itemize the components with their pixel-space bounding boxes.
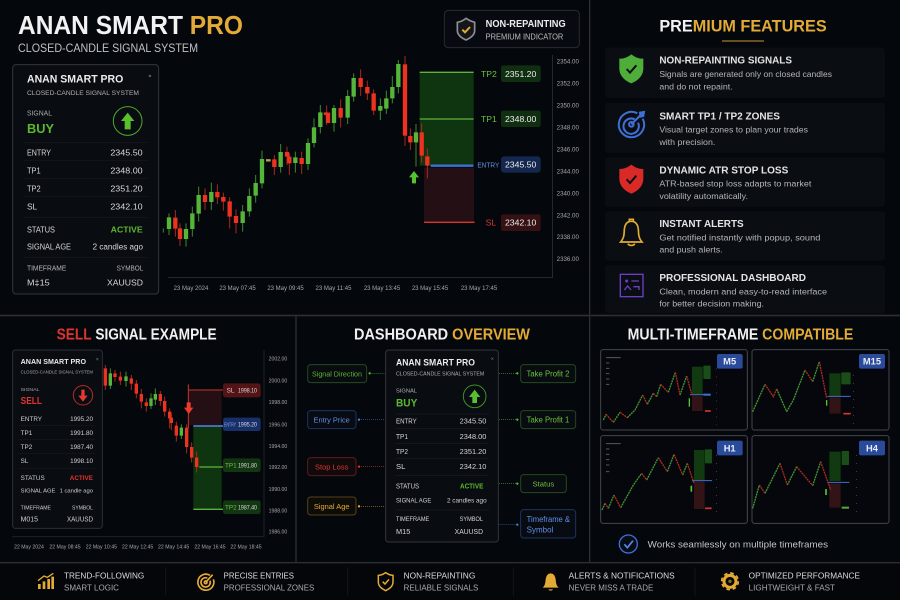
callout: signal direction: Signal Direction bbox=[312, 369, 362, 378]
price axis: 2344.00 bbox=[557, 168, 579, 175]
footer: precise entries bbox=[198, 572, 314, 593]
sell dashboard: × bbox=[96, 357, 99, 363]
footer: alerts and notifications: NEVER MISS A TRADE bbox=[569, 584, 653, 593]
callout: timeframe and symbol: Symbol bbox=[527, 525, 554, 534]
sell dashboard: 1 candle ago bbox=[60, 489, 93, 495]
price axis: 2340.00 bbox=[557, 190, 579, 197]
chart: sell zones bbox=[188, 384, 223, 509]
chart: hero candlesticks bbox=[163, 55, 579, 292]
feature: instant alerts bbox=[605, 211, 885, 261]
feature: non-repainting signals: and do not repaint. bbox=[659, 82, 733, 92]
feature: non-repainting signals: NON-REPAINTING SIGNALS bbox=[659, 56, 792, 67]
sell dashboard: XAUUSD bbox=[67, 517, 93, 524]
overview dashboard: 2345.50 bbox=[460, 417, 486, 426]
label: TP2 bbox=[481, 65, 541, 82]
signal values: 2348.00 bbox=[110, 165, 143, 175]
panel: hero signal dashboard: ANAN SMART PRO bbox=[27, 74, 124, 86]
panel: multi-timeframe background bbox=[591, 317, 900, 562]
icon: red shield bbox=[619, 165, 643, 194]
feature: dynamic ATR stop loss bbox=[605, 157, 885, 207]
title bbox=[18, 12, 243, 55]
badge: H1 bbox=[717, 441, 743, 455]
badge: M15: M15 bbox=[863, 357, 881, 367]
label: TP1 pill: 1991.80 bbox=[238, 464, 258, 470]
heading: DASHBOARD OVERVIEW bbox=[354, 326, 530, 343]
label: TP1 pill: TP1 bbox=[225, 463, 237, 470]
sell dashboard: 1995.20 bbox=[70, 416, 93, 423]
badge: H1: H1 bbox=[724, 443, 736, 453]
price axis: 1992.00 bbox=[269, 465, 287, 471]
label: TP1: 2348.00 bbox=[505, 114, 537, 124]
connector dots bbox=[358, 372, 518, 526]
callout: status bbox=[521, 475, 566, 493]
timeframe and symbol bbox=[27, 266, 143, 288]
price axis: 2002.00 bbox=[269, 357, 287, 363]
date axis bbox=[174, 286, 498, 292]
overview dashboard: ENTRY bbox=[396, 417, 417, 426]
callout: take profit 1 bbox=[521, 411, 576, 429]
overview dashboard: STATUS bbox=[396, 483, 419, 490]
panel: dashboard overview bbox=[308, 326, 576, 542]
callout: stop loss bbox=[308, 458, 356, 476]
price axis: 1998.00 bbox=[269, 400, 287, 406]
chart: M5 bbox=[601, 350, 747, 430]
heading: PREMIUM FEATURES bbox=[659, 16, 827, 35]
price axis bbox=[557, 59, 579, 263]
panel: premium features bbox=[605, 16, 885, 313]
price axis bbox=[269, 357, 287, 536]
overview dashboard: 2 candles ago bbox=[447, 498, 487, 505]
chart axes bbox=[12, 350, 264, 537]
date axis: 23 May 11:45 bbox=[316, 286, 352, 292]
callout: take profit 2 bbox=[521, 365, 576, 383]
note: works seamlessly bbox=[619, 535, 828, 553]
callout: status: Status bbox=[532, 480, 554, 489]
price axis: 1986.00 bbox=[269, 530, 287, 536]
price axis: 1988.00 bbox=[269, 509, 287, 515]
signal values: 2345.50 bbox=[110, 147, 143, 157]
feature: dynamic ATR stop loss: ATR-based stop loss adapts to market bbox=[659, 179, 812, 189]
callout: take profit 1: Take Profit 1 bbox=[527, 416, 570, 425]
price axis: 2354.00 bbox=[557, 59, 579, 66]
callout: signal age bbox=[308, 497, 356, 515]
panel: hero chart background bbox=[0, 0, 589, 314]
candles bbox=[163, 56, 427, 247]
target zones and trade levels bbox=[420, 59, 579, 263]
label: entry pill: 1995.20 bbox=[238, 423, 258, 429]
icon: buy arrow bbox=[463, 385, 486, 408]
chart: M15 bbox=[752, 350, 889, 430]
sell dashboard: SL bbox=[21, 458, 29, 465]
overview dashboard: TP1 bbox=[396, 432, 408, 441]
date axis: 22 May 12:45 bbox=[122, 544, 153, 550]
footer: precise entries: PROFESSIONAL ZONES bbox=[224, 584, 314, 593]
footer: optimized performance: OPTIMIZED PERFORMANCE bbox=[749, 572, 860, 581]
feature: dynamic ATR stop loss: volatility automatically. bbox=[659, 191, 748, 201]
date axis: 23 May 13:45 bbox=[364, 286, 401, 292]
callout: entry price bbox=[308, 411, 356, 429]
badge: H4: H4 bbox=[866, 443, 879, 453]
signal values: TP2 bbox=[27, 183, 41, 193]
panel: hero signal dashboard: ⌗ bbox=[149, 73, 152, 78]
date axis: 22 May 08:45 bbox=[49, 544, 81, 550]
sell dashboard bbox=[13, 350, 102, 528]
callout: timeframe and symbol: Timeframe & bbox=[527, 515, 571, 524]
signal values: 2 candles ago bbox=[93, 242, 143, 252]
label: TP1 bbox=[481, 111, 541, 127]
label: entry pill: ENTRY bbox=[224, 423, 236, 429]
price axis: 2346.00 bbox=[557, 146, 579, 153]
chart axes bbox=[168, 55, 552, 278]
panel: multi-timeframe compatible bbox=[601, 326, 889, 553]
feature: smart TP zones: SMART TP1 / TP2 ZONES bbox=[659, 111, 780, 122]
label: SL pill: 1998.10 bbox=[238, 389, 258, 395]
label: TP2: 2351.20 bbox=[505, 69, 537, 79]
date axis: 22 May 16:45 bbox=[194, 544, 226, 550]
date axis: 23 May 07:45 bbox=[219, 286, 256, 292]
label: entry: ENTRY bbox=[477, 161, 499, 170]
feature: professional dashboard: for better decision making. bbox=[659, 299, 764, 309]
sell dashboard: 1991.80 bbox=[70, 430, 93, 437]
timeframe and symbol: SYMBOL bbox=[117, 266, 143, 273]
sell dashboard: 1987.40 bbox=[70, 444, 93, 451]
price axis: 2348.00 bbox=[557, 124, 579, 131]
overview dashboard: CLOSED-CANDLE SIGNAL SYSTEM bbox=[396, 372, 484, 378]
date axis: 22 May 14:45 bbox=[158, 544, 189, 550]
date axis: 22 May 18:45 bbox=[230, 544, 262, 550]
date axis: 23 May 17:45 bbox=[461, 286, 498, 292]
footer: alerts and notifications bbox=[543, 572, 675, 593]
callout: signal direction bbox=[308, 365, 367, 383]
label: entry pill bbox=[223, 418, 261, 431]
overview dashboard: XAUUSD bbox=[455, 529, 483, 536]
feature: professional dashboard bbox=[605, 265, 885, 313]
price axis: 2338.00 bbox=[557, 234, 579, 241]
date axis: 23 May 09:45 bbox=[267, 286, 304, 292]
feature: smart TP zones bbox=[605, 103, 885, 153]
overview dashboard bbox=[386, 350, 498, 542]
icon: buy entry arrow bbox=[409, 171, 419, 183]
signal values: SL bbox=[27, 201, 38, 211]
label: TP2: TP2 bbox=[481, 69, 497, 79]
panel: sell background bbox=[0, 317, 295, 562]
price axis: 2352.00 bbox=[557, 80, 579, 87]
icon: blue target bbox=[619, 112, 644, 137]
overview dashboard: SIGNAL bbox=[396, 389, 417, 395]
label: SL: SL bbox=[486, 218, 496, 228]
feature: professional dashboard: Clean, modern and easy-to-read interface bbox=[659, 286, 827, 296]
timeframe and symbol: TIMEFRAME bbox=[27, 266, 67, 273]
badge: M5: M5 bbox=[723, 357, 736, 367]
sell dashboard: ENTRY bbox=[21, 416, 43, 423]
feature: professional dashboard: PROFESSIONAL DASHBOARD bbox=[659, 273, 806, 284]
signal values: 2342.10 bbox=[110, 201, 143, 211]
overview dashboard: SYMBOL bbox=[460, 516, 483, 523]
sell dashboard: ACTIVE bbox=[70, 475, 93, 482]
sell dashboard: SIGNAL bbox=[21, 387, 40, 393]
footer: optimized performance: LIGHTWEIGHT & FAST bbox=[749, 584, 835, 593]
signal values: TP1 bbox=[27, 165, 41, 175]
feature: instant alerts: INSTANT ALERTS bbox=[659, 219, 744, 230]
feature: non-repainting signals: Signals are generated only on closed candles bbox=[659, 69, 832, 79]
note: works seamlessly: Works seamlessly on multiple timeframes bbox=[648, 539, 828, 549]
overview dashboard: 2342.10 bbox=[460, 462, 486, 471]
overview dashboard: SL bbox=[396, 462, 405, 471]
callout: take profit 2: Take Profit 2 bbox=[526, 370, 570, 379]
label: entry bbox=[477, 156, 541, 173]
feature: instant alerts: Get notified instantly with popup, sound bbox=[659, 232, 821, 242]
chart: sell candles bbox=[105, 365, 197, 472]
feature: instant alerts: and push alerts. bbox=[659, 245, 723, 255]
label: SL pill bbox=[223, 383, 261, 397]
icon: sell entry arrow bbox=[184, 402, 193, 414]
price axis: 2342.00 bbox=[557, 212, 579, 219]
sell dashboard: M015 bbox=[21, 517, 38, 524]
panel: hero signal dashboard bbox=[13, 65, 159, 294]
icon: buy arrow bbox=[113, 107, 142, 135]
feature: dynamic ATR stop loss: DYNAMIC ATR STOP LOSS bbox=[659, 165, 789, 176]
icon: dashboard bbox=[620, 274, 643, 297]
signal values: ENTRY bbox=[27, 147, 51, 157]
footer: precise entries: PRECISE ENTRIES bbox=[224, 572, 294, 581]
sell dashboard: TIMEFRAME bbox=[21, 506, 51, 512]
panel: hero signal dashboard: CLOSED-CANDLE SIGNAL SYSTEM bbox=[27, 90, 139, 97]
sell dashboard: CLOSED-CANDLE SIGNAL SYSTEM bbox=[21, 370, 93, 375]
label: TP2 pill bbox=[223, 500, 261, 514]
overview dashboard: M15 bbox=[396, 529, 410, 536]
price axis: 1994.00 bbox=[269, 444, 287, 450]
panel: premium features background bbox=[591, 0, 900, 314]
sell dashboard: SELL bbox=[21, 396, 42, 407]
footer: non-repainting: NON-REPAINTING bbox=[404, 572, 475, 581]
overview dashboard: ANAN SMART PRO bbox=[396, 357, 475, 367]
label: entry: 2345.50 bbox=[505, 160, 537, 170]
footer: optimized performance bbox=[722, 572, 860, 593]
date axis: 23 May 15:45 bbox=[412, 286, 449, 292]
signal values: 2351.20 bbox=[110, 183, 143, 193]
label: TP1: TP1 bbox=[481, 114, 497, 124]
overview dashboard: BUY bbox=[396, 397, 418, 409]
callout: signal age: Signal Age bbox=[314, 502, 349, 511]
price axis: 2000.00 bbox=[269, 378, 287, 384]
footer: non-repainting bbox=[378, 572, 478, 593]
connector lines bbox=[359, 373, 517, 525]
timeframe and symbol: XAUUSD bbox=[107, 278, 143, 288]
sell dashboard: 1998.10 bbox=[70, 458, 93, 465]
panel: hero signal dashboard: BUY bbox=[27, 121, 54, 136]
footer: alerts and notifications: ALERTS & NOTIFICATIONS bbox=[569, 572, 675, 581]
badge: M5 bbox=[717, 354, 743, 369]
panel: footer background bbox=[0, 564, 900, 600]
title: CLOSED-CANDLE SIGNAL SYSTEM bbox=[18, 41, 198, 55]
panel: sell signal example bbox=[12, 326, 287, 550]
overview dashboard: TP2 bbox=[396, 447, 408, 456]
chart: H4 bbox=[752, 436, 889, 523]
overview dashboard: 2348.00 bbox=[460, 432, 486, 441]
date axis bbox=[14, 544, 262, 550]
heading: SELL SIGNAL EXAMPLE bbox=[57, 326, 217, 343]
signal values: STATUS bbox=[27, 225, 55, 235]
date axis: 22 May 10:45 bbox=[86, 544, 117, 550]
badge: non-repainting bbox=[444, 10, 579, 48]
overview dashboard: TIMEFRAME bbox=[396, 516, 429, 523]
badge: non-repainting: NON-REPAINTING bbox=[486, 19, 566, 30]
panel: dashboard background bbox=[297, 317, 589, 562]
overview dashboard: ACTIVE bbox=[460, 483, 484, 490]
signal values bbox=[27, 147, 143, 252]
panel: footer strip bbox=[38, 567, 860, 596]
sell dashboard: SYMBOL bbox=[72, 506, 93, 512]
feature: smart TP zones: with precision. bbox=[658, 137, 715, 147]
label: SL: 2342.10 bbox=[505, 218, 537, 228]
chart: H1 bbox=[601, 436, 747, 523]
panel: hero signal dashboard: SIGNAL bbox=[27, 110, 52, 117]
overview dashboard: × bbox=[491, 357, 494, 363]
icon: bell bbox=[621, 219, 642, 245]
label: TP1 pill bbox=[223, 458, 261, 472]
footer: non-repainting: RELIABLE SIGNALS bbox=[404, 584, 478, 593]
label: TP2 pill: 1987.40 bbox=[238, 505, 258, 511]
overview dashboard: SIGNAL AGE bbox=[396, 498, 432, 505]
callout: timeframe and symbol bbox=[521, 510, 576, 538]
price axis: 2350.00 bbox=[557, 102, 579, 109]
label: SL pill: SL bbox=[227, 388, 235, 395]
title: ANAN SMART PRO bbox=[18, 12, 243, 40]
price axis: 1996.00 bbox=[269, 422, 287, 428]
icon: green shield bbox=[619, 54, 643, 83]
badge: non-repainting: PREMIUM INDICATOR bbox=[486, 32, 563, 42]
sell dashboard: SIGNAL AGE bbox=[21, 489, 56, 495]
footer: trend-following bbox=[38, 572, 144, 593]
timeframe and symbol: M‡15 bbox=[27, 278, 50, 288]
callout: entry price: Entry Price bbox=[313, 416, 350, 425]
sell dashboard: TP1 bbox=[21, 430, 33, 437]
label: TP2 pill: TP2 bbox=[225, 504, 237, 511]
heading: MULTI-TIMEFRAME COMPATIBLE bbox=[628, 326, 853, 343]
feature: non-repainting signals bbox=[605, 48, 885, 98]
signal values: SIGNAL AGE bbox=[27, 242, 71, 252]
feature: smart TP zones: Visual target zones to plan your trades bbox=[659, 125, 808, 135]
date axis: 22 May 2024 bbox=[14, 544, 44, 550]
date axis: 23 May 2024 bbox=[174, 286, 209, 292]
callout: stop loss: Stop Loss bbox=[315, 462, 349, 471]
overview dashboard: 2351.20 bbox=[460, 447, 486, 456]
label: SL bbox=[486, 214, 541, 231]
sell dashboard: ANAN SMART PRO bbox=[21, 357, 86, 366]
sell dashboard: STATUS bbox=[21, 475, 45, 482]
price axis: 2336.00 bbox=[557, 256, 579, 263]
sell dashboard: TP2 bbox=[21, 444, 33, 451]
price axis: 1990.00 bbox=[269, 487, 287, 493]
icon: sell arrow bbox=[73, 386, 93, 405]
footer: trend-following: SMART LOGIC bbox=[64, 584, 119, 593]
signal values: ACTIVE bbox=[111, 225, 143, 235]
footer: trend-following: TREND-FOLLOWING bbox=[64, 572, 144, 581]
